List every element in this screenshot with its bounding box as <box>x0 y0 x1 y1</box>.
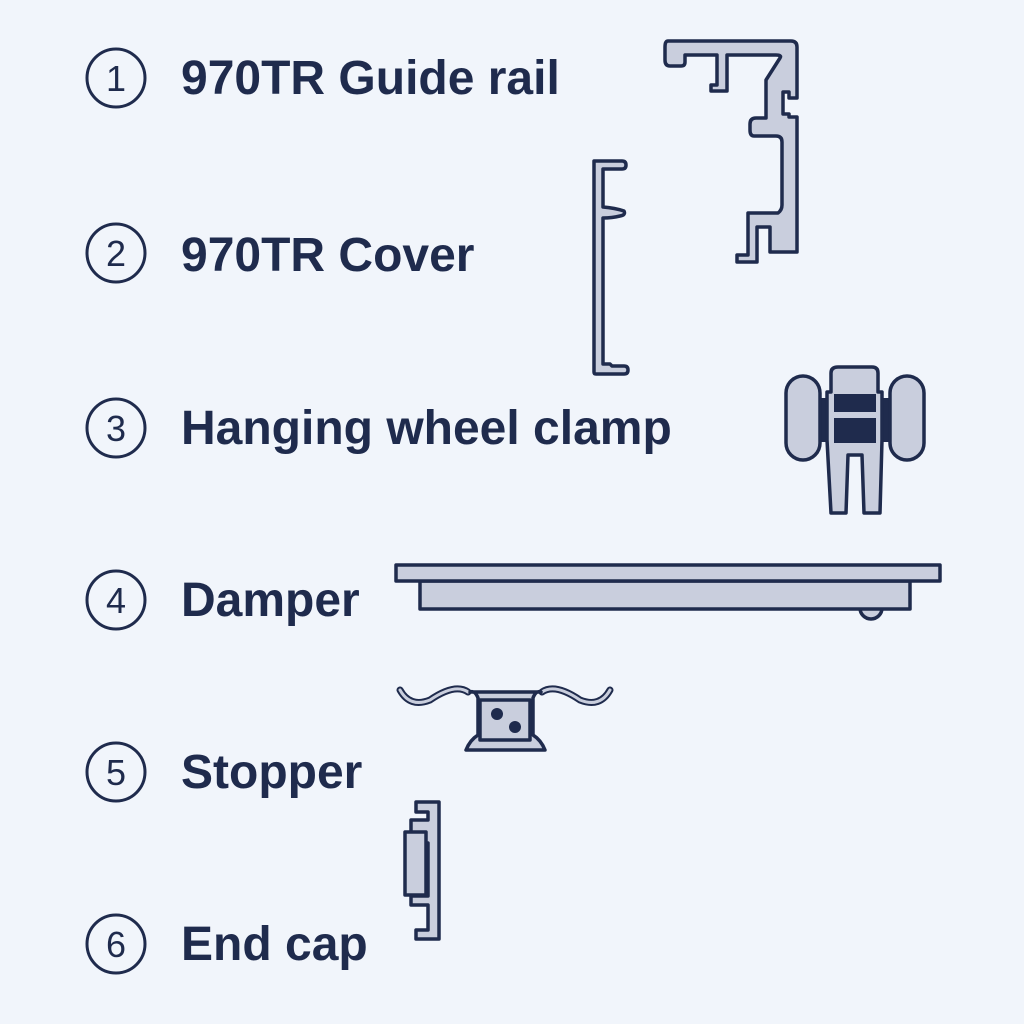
item 4 label <box>87 571 360 629</box>
item 6 label: 6 <box>106 924 126 965</box>
item 4 label: Damper <box>181 574 360 627</box>
item 1 label: 1 <box>106 58 126 99</box>
icon: damper <box>396 565 940 619</box>
item 2 label <box>87 224 474 282</box>
icon: end cap <box>405 802 439 939</box>
item 4 label: 4 <box>106 580 126 621</box>
icon: hanging wheel clamp <box>786 367 924 513</box>
item 2 label: 2 <box>106 233 126 274</box>
item 3 label: Hanging wheel clamp <box>181 402 672 455</box>
item 1 label: 970TR Guide rail <box>181 52 560 105</box>
icon: cover profile <box>594 161 628 374</box>
icon: guide rail profile <box>665 41 797 262</box>
item 2 label: 970TR Cover <box>181 229 474 282</box>
item 6 label <box>87 915 368 973</box>
item 5 label: Stopper <box>181 746 362 799</box>
item 5 label: 5 <box>106 752 126 793</box>
item 3 label: 3 <box>106 408 126 449</box>
icon: stopper <box>400 689 610 750</box>
item 5 label <box>87 743 362 801</box>
item 6 label: End cap <box>181 918 368 971</box>
